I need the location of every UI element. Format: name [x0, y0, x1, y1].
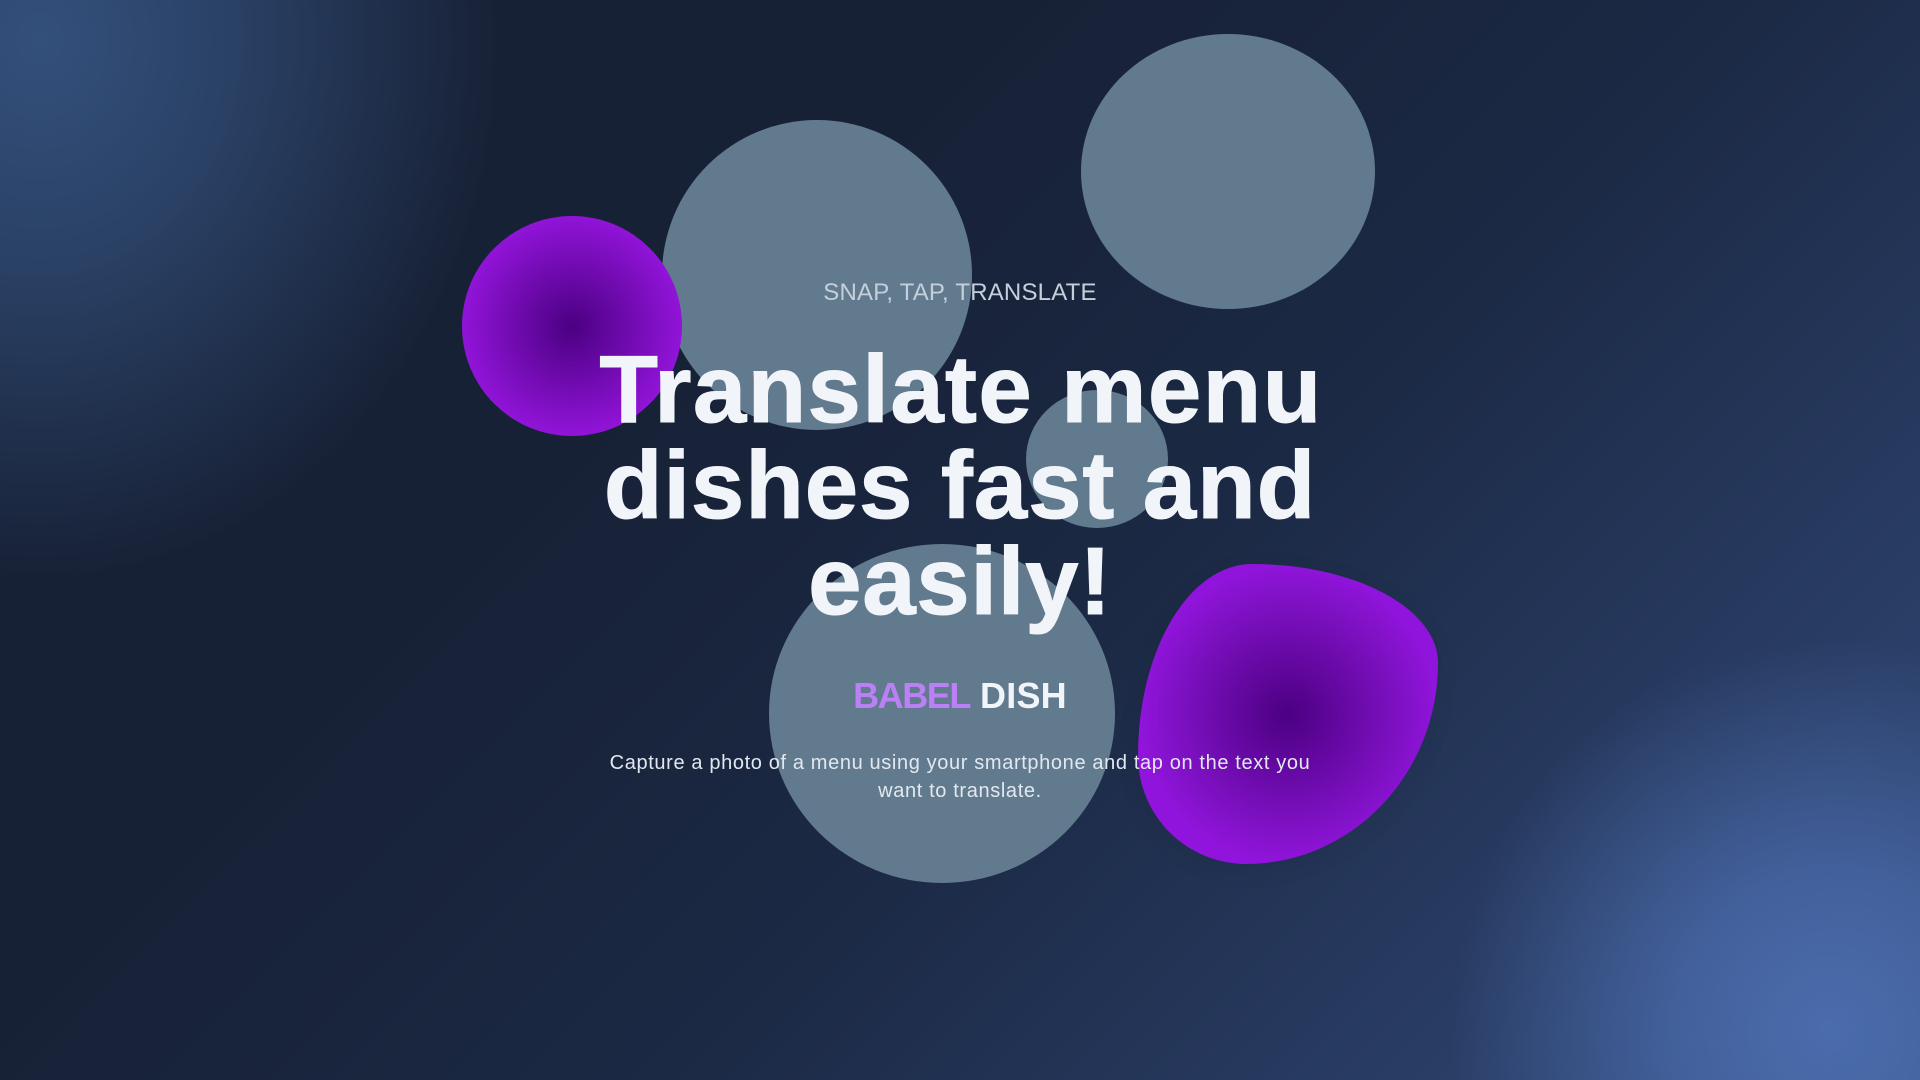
- shape: large grey circle upper centre: [662, 120, 972, 430]
- brand name: BABEL DISH: [853, 675, 1067, 716]
- title: Translate menu: [599, 336, 1323, 443]
- description: want to translate.: [878, 780, 1042, 802]
- description: Capture a photo of a menu using your smartphone and tap on the text you: [610, 752, 1310, 774]
- title: [599, 336, 1323, 635]
- description: [610, 752, 1310, 802]
- shape: small grey circle centre: [1026, 390, 1168, 528]
- title: easily!: [808, 528, 1112, 635]
- shape: purple gradient circle: [462, 216, 682, 436]
- eyebrow text: SNAP, TAP, TRANSLATE: [823, 279, 1097, 306]
- title: dishes fast and: [604, 432, 1316, 539]
- shape: large grey circle lower centre: [769, 544, 1115, 883]
- shape: purple gradient blob: [1138, 564, 1438, 864]
- shape: grey ellipse top right: [1081, 34, 1375, 309]
